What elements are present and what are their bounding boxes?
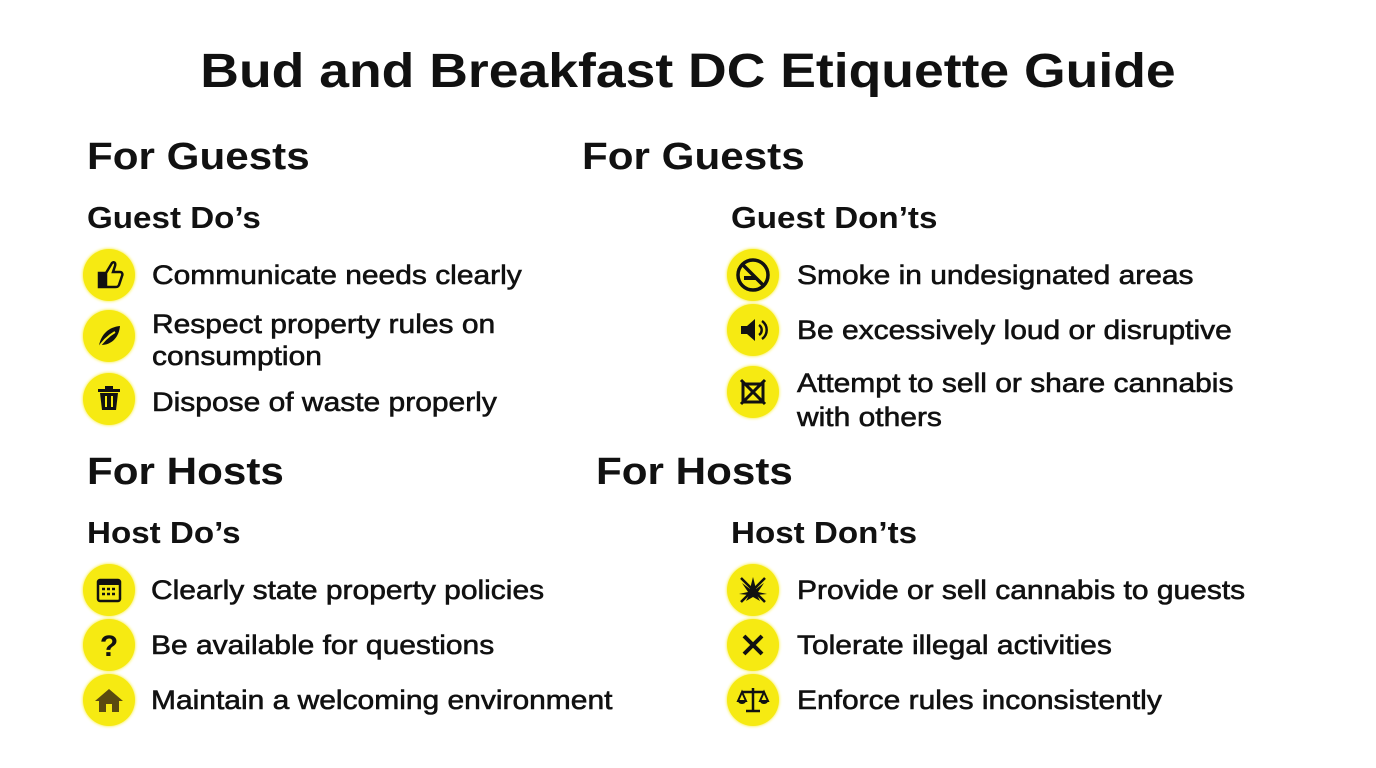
item: Be excessively loud or disruptive (797, 315, 1232, 345)
icon: x mark (727, 619, 779, 671)
item: Attempt to sell or share cannabis (797, 368, 1233, 398)
subheading: guest dos: Guest Do’s (87, 200, 261, 235)
heading: for hosts right: For Hosts (596, 451, 793, 493)
item: Provide or sell cannabis to guests (797, 575, 1245, 605)
icon: house (83, 674, 135, 726)
icon: trash (83, 373, 135, 425)
item: Dispose of waste properly (152, 387, 497, 417)
item: Tolerate illegal activities (797, 630, 1112, 660)
icon: no sharing (727, 366, 779, 418)
item: Be available for questions (151, 630, 494, 660)
icon: question: ? (100, 630, 118, 663)
item: Enforce rules inconsistently (797, 685, 1162, 715)
item: Respect property rules on (152, 309, 495, 339)
icon: speaker (727, 304, 779, 356)
heading: for guests left: For Guests (87, 136, 310, 178)
icon: no cannabis (727, 564, 779, 616)
item: with others (797, 402, 942, 432)
subheading: guest donts: Guest Don’ts (731, 200, 937, 235)
item: Maintain a welcoming environment (151, 685, 612, 715)
title: Bud and Breakfast DC Etiquette Guide (200, 45, 1176, 98)
icon: calendar (83, 564, 135, 616)
item (152, 309, 495, 371)
icon: scales (727, 674, 779, 726)
item: Clearly state property policies (151, 575, 544, 605)
icon: no smoking (727, 249, 779, 301)
item: consumption (152, 341, 322, 371)
icon: thumbs up (83, 249, 135, 301)
subheading: host dos: Host Do’s (87, 515, 241, 550)
icon: question (83, 619, 135, 671)
item: Smoke in undesignated areas (797, 260, 1194, 290)
heading: for hosts left: For Hosts (87, 451, 284, 493)
icon: leaf (83, 310, 135, 362)
heading: for guests right: For Guests (582, 136, 805, 178)
item (796, 368, 1233, 432)
subheading: host donts: Host Don’ts (731, 515, 917, 550)
item: Communicate needs clearly (152, 260, 522, 290)
